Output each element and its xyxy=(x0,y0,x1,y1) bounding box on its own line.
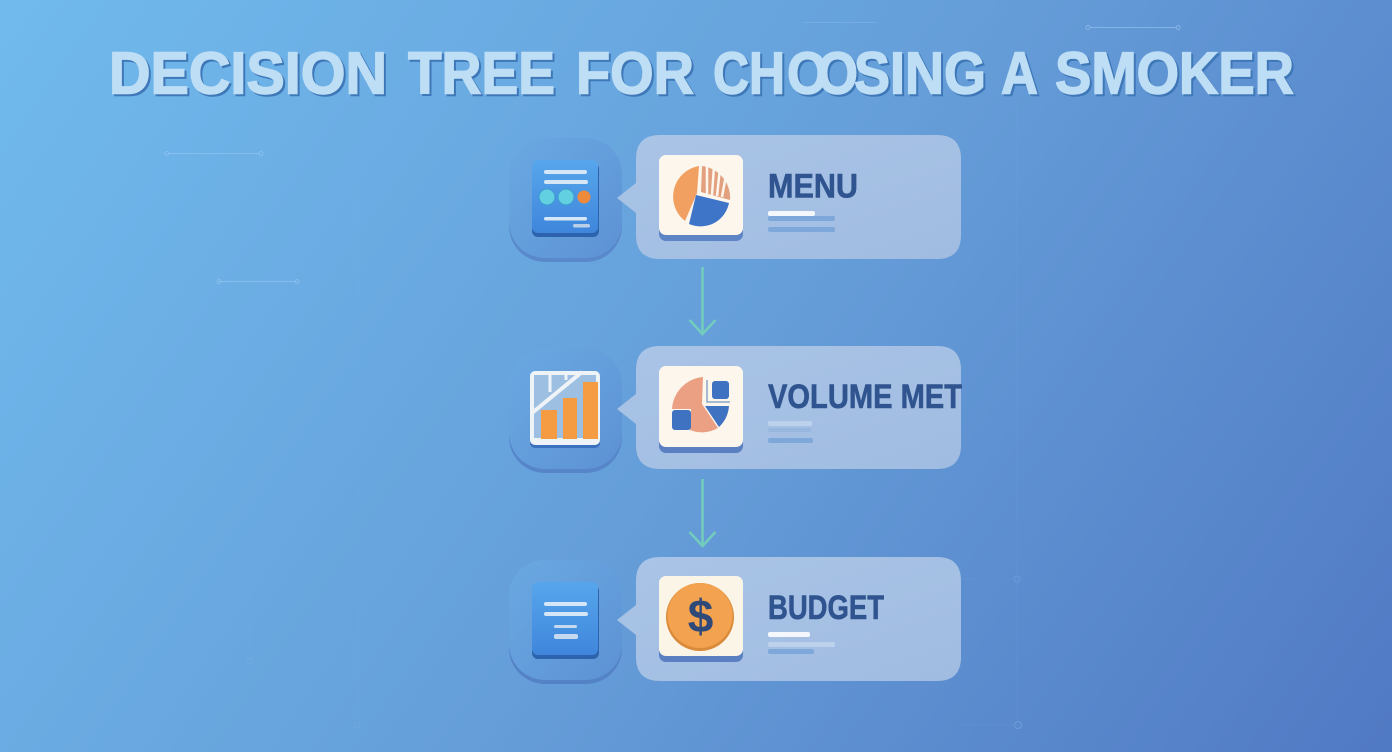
card: menu xyxy=(617,135,961,259)
title: DECISION xyxy=(109,40,387,106)
step: menu xyxy=(509,135,961,262)
step: budget xyxy=(509,557,961,684)
title: O xyxy=(787,40,828,106)
title xyxy=(109,40,1294,106)
icon tile: bar chart xyxy=(509,349,622,473)
title: SMOKER xyxy=(1055,40,1294,106)
arrow: menu to volume xyxy=(690,267,716,334)
chart tile: dollar coin: $ xyxy=(688,590,713,642)
text placeholder lines xyxy=(768,632,835,654)
label: volume: VOLUME MET xyxy=(768,378,962,416)
chart tile: segmented pie xyxy=(659,366,743,453)
text placeholder lines xyxy=(768,421,813,443)
text placeholder lines xyxy=(768,211,835,232)
card: volume xyxy=(617,346,962,469)
label: menu: MENU xyxy=(768,168,858,206)
title: TREE xyxy=(408,40,555,106)
title: O xyxy=(817,40,858,106)
label: budget: BUDGET xyxy=(768,589,884,627)
card: budget xyxy=(617,557,961,681)
title: SING xyxy=(854,40,986,106)
icon tile: budget document xyxy=(509,560,622,684)
title: A xyxy=(1001,40,1038,106)
arrow: volume to budget xyxy=(690,479,716,546)
step: volume xyxy=(509,346,962,473)
icon tile: menu document xyxy=(509,138,622,262)
chart tile: pie xyxy=(659,155,743,241)
chart tile: dollar coin xyxy=(659,576,743,662)
title: FOR xyxy=(576,40,694,106)
title: CH xyxy=(713,40,785,106)
